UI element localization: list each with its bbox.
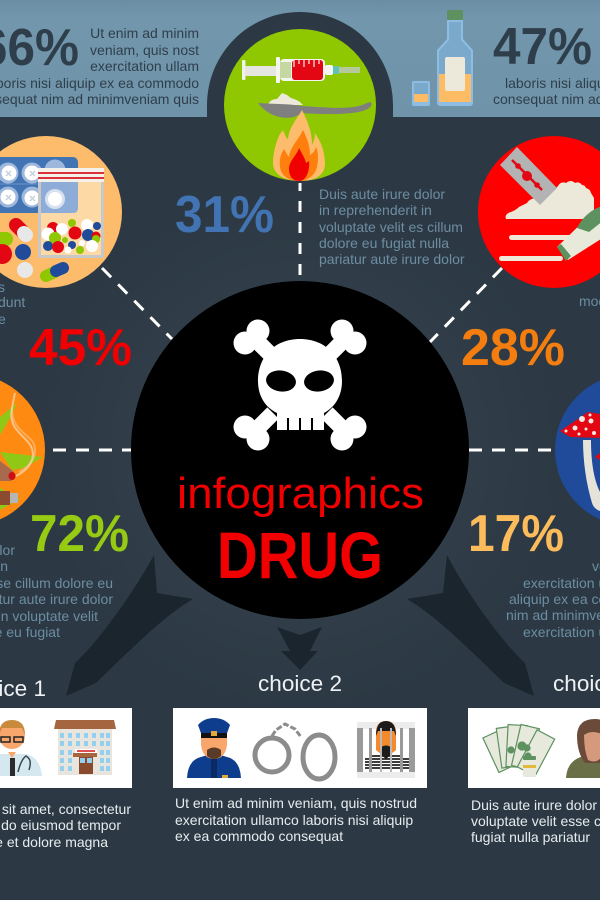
dashed connectors <box>53 183 552 450</box>
icon: police officer <box>187 718 241 778</box>
top band <box>0 0 600 117</box>
icon: money and pill bottle <box>483 725 555 777</box>
text block: left lower: in voluptate velit <box>0 608 98 624</box>
text block: centre top <box>319 186 465 267</box>
centre circle <box>131 281 469 619</box>
arrow: left <box>66 555 193 696</box>
stat 45%: 45% <box>29 319 132 377</box>
icon: hospital <box>54 720 116 775</box>
choice 3 panel: fugiat nulla pariatur <box>471 829 590 845</box>
stat 66%: Ut enim ad minim <box>90 25 199 41</box>
text: left pills fragment <box>0 279 25 327</box>
icon: bottle and glass <box>412 10 473 106</box>
text block: centre top: pariatur aute irure dolor <box>319 251 465 267</box>
band cut-out circle <box>207 12 393 198</box>
text block: centre top: voluptate velit es cillum <box>319 219 463 235</box>
stat 66%: exercitation ullam <box>90 58 199 74</box>
stat 28%: 28% <box>461 319 565 377</box>
lower band edge <box>207 105 393 118</box>
text block: centre top: in reprehenderit in <box>319 202 432 218</box>
heading: DRUG: DRUG <box>217 518 383 592</box>
stat 47% <box>493 18 600 107</box>
icon: skull and crossbones <box>234 320 366 450</box>
choice 1 panel <box>0 676 132 850</box>
icon: orange circle cigar <box>0 374 45 526</box>
stat 17%: 17% <box>468 505 564 563</box>
stat 72%: 72% <box>30 505 129 563</box>
icon: green circle syringe spoon fire <box>224 29 376 181</box>
icon: blue circle mushroom <box>555 374 600 526</box>
stat 66%: veniam, quis nost <box>90 42 199 58</box>
icon: doctor <box>0 720 42 776</box>
arrow: right <box>407 555 534 696</box>
arrow: centre <box>277 627 322 670</box>
choice 2 panel: exercitation ullamco laboris nisi aliquip <box>175 812 413 828</box>
stat 31%: 31% <box>175 186 274 244</box>
text block: centre top: Duis aute irure dolor <box>319 186 445 202</box>
stat 47%: 47% <box>493 18 592 76</box>
text block: centre top: dolore eu fugiat nulla <box>319 235 449 251</box>
icon: orange circle pills <box>0 136 122 288</box>
choice 2 panel: Ut enim ad minim veniam, quis nostrud <box>175 795 417 811</box>
icon: addicted person <box>566 719 600 778</box>
choice 3 panel <box>468 671 600 845</box>
heading: infographics <box>177 469 424 518</box>
choice 2 panel: ex ea commodo consequat <box>175 828 343 844</box>
stat 66% <box>0 19 199 107</box>
choice 2 panel <box>173 671 427 844</box>
icon: red circle razor powder <box>478 136 600 288</box>
text block: right lower <box>506 558 600 640</box>
skull eyes and teeth <box>265 369 335 430</box>
icon: prisoner behind bars <box>357 721 417 778</box>
icon: handcuffs <box>255 724 335 779</box>
text block: left lower <box>0 542 113 640</box>
choice 2 panel: choice 2 <box>258 671 342 696</box>
